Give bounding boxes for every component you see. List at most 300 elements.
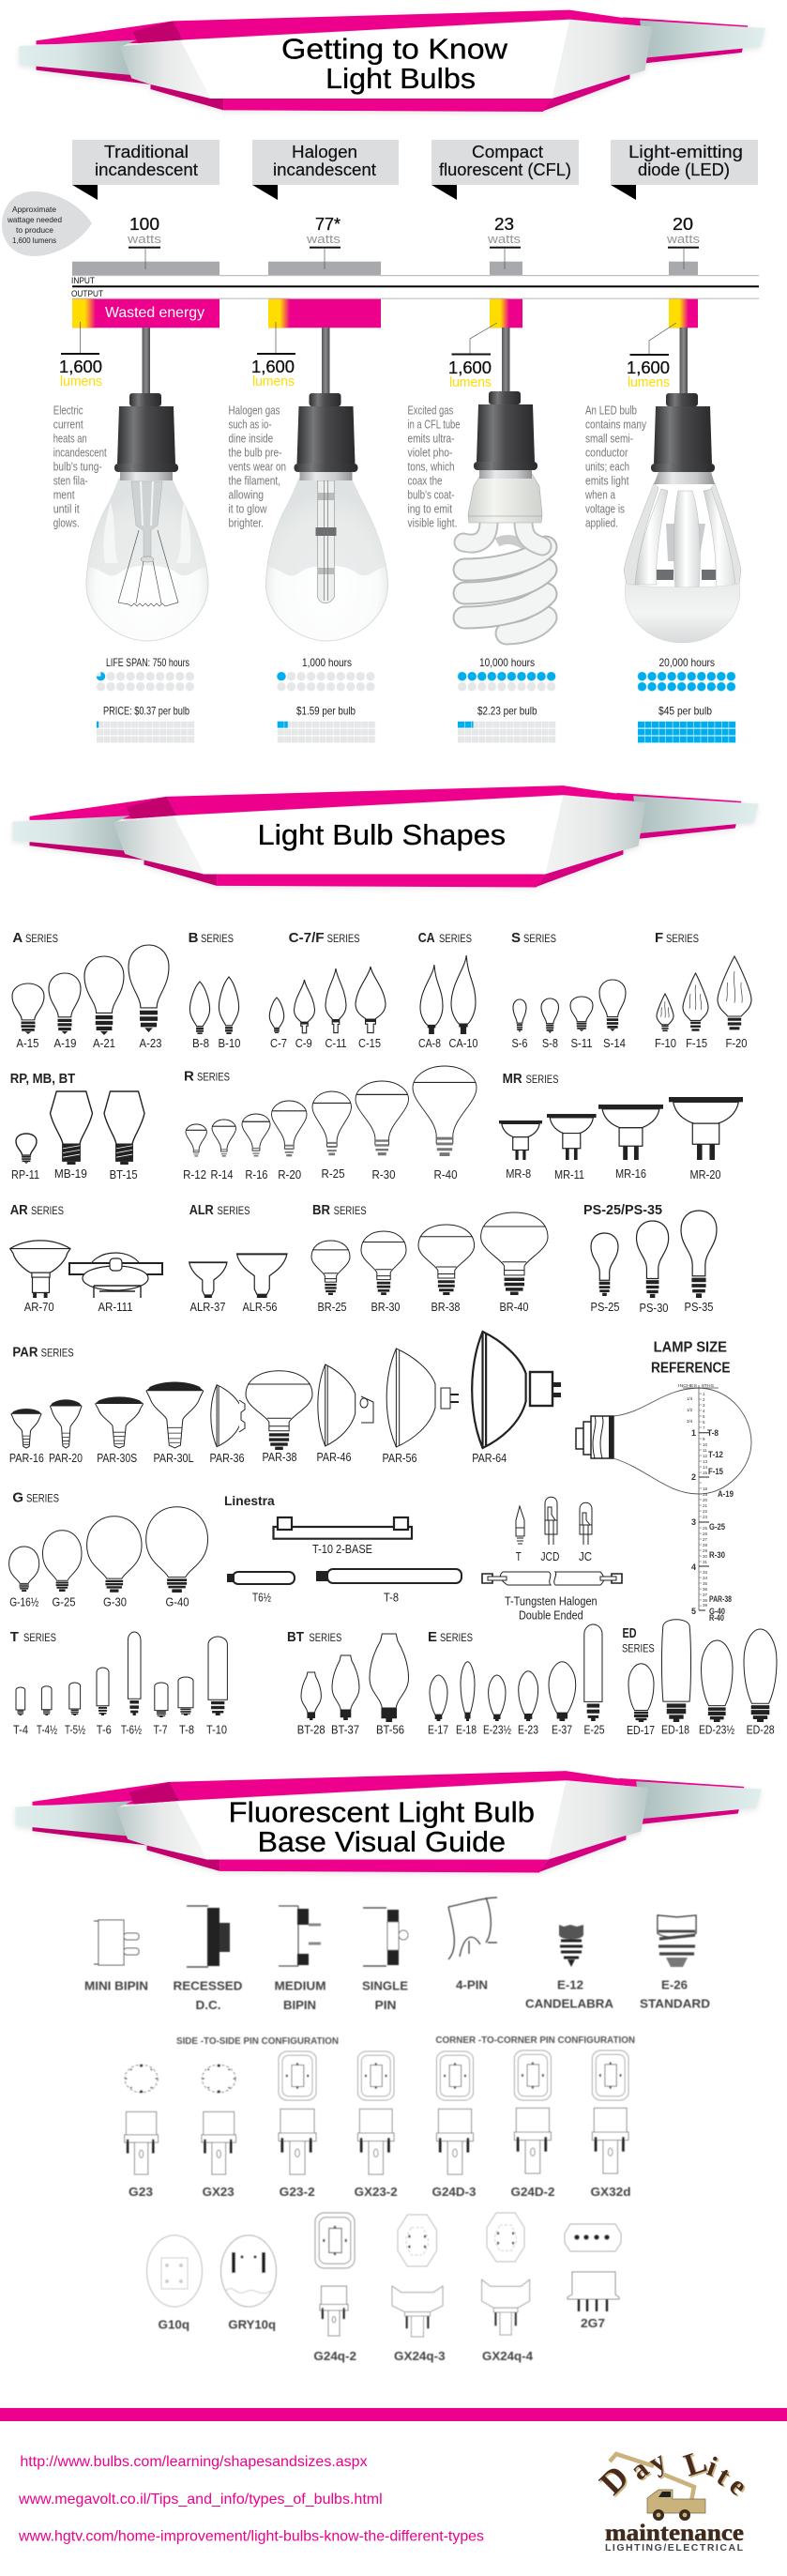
- series: B: B: [189, 930, 199, 946]
- icon: T6½ tube: [227, 1572, 295, 1584]
- group: T, JCD, JC halogen: JCD: [540, 1549, 559, 1563]
- series: G: [9, 1490, 207, 1609]
- series: ED: ED-28: [747, 1723, 775, 1737]
- panel: second base row: 2G7: [581, 2316, 605, 2330]
- diagram: inch ruler: 4: [703, 1409, 705, 1413]
- series: PAR: [9, 1332, 561, 1465]
- text: CFL description: [407, 404, 461, 530]
- icon: incandescent bulb: [86, 328, 208, 641]
- title: Fluorescent Light Bulb Base Visual Guide: Base Visual Guide: [257, 1825, 506, 1858]
- series: R: R-30: [371, 1167, 396, 1181]
- banner: Getting to Know Light Bulbs: [19, 10, 765, 112]
- chart: price grid: PRICE: $0.37 per bulb: [103, 705, 189, 718]
- labels: fluorescent base names: MEDIUM: [274, 1979, 326, 1993]
- chart: life span dots: [96, 656, 736, 692]
- series: AR: [10, 1202, 162, 1314]
- panel: pin configuration row: [125, 2050, 631, 2199]
- series: CA: CA: [418, 930, 435, 946]
- icon: G10q: [146, 2235, 203, 2307]
- series: B: B-10: [218, 1036, 240, 1050]
- series: AR: SERIES: [31, 1204, 64, 1217]
- logo wordmark: Day Lite: a: [625, 2453, 655, 2486]
- series: PAR: PAR-64: [472, 1451, 507, 1465]
- series: ED: ED-17: [627, 1723, 655, 1737]
- source links: http://www.bulbs.com/learning/shapesandsizes.aspx: [20, 2454, 368, 2470]
- series: BT: SERIES: [309, 1631, 341, 1644]
- icon: PAR-46 side lamp: [318, 1364, 373, 1446]
- diagram: inch ruler: 38: [703, 1598, 708, 1603]
- labels: fluorescent base names: E-26: [661, 1978, 688, 1991]
- chart: input wattage labels: watts: [666, 232, 701, 246]
- chart: lumens output labels: 1,600: [448, 358, 492, 377]
- diagram: inch ruler: 33: [703, 1570, 708, 1575]
- series: PAR: PAR-16: [9, 1451, 44, 1465]
- callout: approximate wattage: to produce: [16, 225, 53, 235]
- series: ED: [622, 1620, 777, 1737]
- series: MR: MR-16: [615, 1166, 646, 1181]
- text: LED description: An LED bulb: [585, 404, 637, 418]
- series: E: E-23½: [483, 1723, 511, 1737]
- series: RP, MB, BT: BT-15: [110, 1167, 138, 1181]
- header: traditional incandescent: incandescent: [95, 160, 198, 179]
- labels: fluorescent base names: SIDE -TO-SIDE PIN CONFIGURATION: [176, 2035, 339, 2047]
- series: Linestra: T6½: [252, 1591, 271, 1605]
- text: halogen description: dine inside: [229, 433, 273, 446]
- text: LED description: units; each: [585, 461, 629, 474]
- diagram: inch ruler: 34: [703, 1576, 708, 1580]
- icon: LED bulb: [624, 328, 741, 643]
- panel: lamp size reference: [576, 1340, 751, 1623]
- series: E: SERIES: [440, 1631, 473, 1644]
- icon: PAR-36 side lamp: [211, 1385, 245, 1447]
- series: RP, MB, BT: RP, MB, BT: [10, 1071, 75, 1087]
- series: PAR: PAR-46: [317, 1450, 351, 1464]
- icon: E-26 standard: [658, 1915, 696, 1967]
- labels: fluorescent base names: PIN: [375, 1998, 396, 2012]
- chart: lumens output labels: lumens: [449, 374, 492, 390]
- text: incandescent description: Electric: [53, 404, 83, 418]
- logo wordmark: Day Lite: D: [592, 2458, 636, 2502]
- series: Linestra: [224, 1493, 462, 1605]
- chart: input wattage labels: 20: [673, 215, 693, 234]
- diagram: inch ruler: [678, 1383, 734, 1623]
- diagram: inch ruler: 11: [703, 1448, 707, 1453]
- series: ED: ED-23½: [699, 1723, 734, 1737]
- series: ED: ED: [623, 1625, 637, 1641]
- icon: E-12 candelabra: [559, 1925, 583, 1967]
- series: A: A-19: [54, 1036, 77, 1050]
- title: Fluorescent Light Bulb Base Visual Guide: Fluorescent Light Bulb: [229, 1796, 535, 1829]
- panel: second base row: G24q-2: [313, 2349, 356, 2363]
- panel: fluorescent bases row: [94, 1898, 696, 1967]
- series: PAR: SERIES: [41, 1347, 74, 1360]
- series: BR: BR: [312, 1202, 330, 1218]
- diagram: inch ruler: 12: [703, 1454, 708, 1458]
- series: BR: BR-25: [317, 1300, 347, 1314]
- series: E: E-37: [552, 1723, 572, 1737]
- diagram: inch ruler: T-12: [708, 1450, 723, 1459]
- diagram: inch ruler: 5: [703, 1414, 705, 1419]
- labels: fluorescent base names: RECESSED: [173, 1979, 242, 1993]
- series: F: [655, 930, 751, 1050]
- header: halogen incandescent: Halogen: [292, 143, 357, 161]
- series: C-7/F: C-11: [325, 1036, 347, 1050]
- series: S: SERIES: [523, 932, 556, 945]
- text: CFL description: in a CFL tube: [407, 419, 461, 432]
- series: MR: MR-20: [690, 1167, 720, 1181]
- chart: output bars with wasted energy: [72, 299, 698, 328]
- group: T, JCD, JC halogen: Double Ended: [519, 1608, 583, 1623]
- diagram: inch ruler: 3/4: [687, 1419, 693, 1424]
- diagram: inch ruler: F-15: [708, 1467, 723, 1476]
- header: traditional incandescent: Traditional: [104, 143, 189, 161]
- series: A: A-21: [93, 1036, 115, 1050]
- diagram: inch ruler: 3: [691, 1517, 696, 1527]
- logo: Day Lite maintenance: [592, 2444, 753, 2553]
- series: ALR: ALR-37: [189, 1300, 225, 1314]
- series: CA: [418, 930, 478, 1050]
- logo wordmark: Day Lite: [592, 2444, 753, 2502]
- icon: 4-pin: [448, 1898, 497, 1959]
- diagram: inch ruler: A-19: [718, 1489, 734, 1499]
- series: PS-25/PS-35: PS-25/PS-35: [583, 1202, 662, 1218]
- series: S: S-11: [570, 1036, 593, 1050]
- diagram: bulb outline with base: [576, 1388, 751, 1494]
- series: PS-25/PS-35: PS-25: [591, 1300, 619, 1314]
- text: halogen description: vents wear on: [229, 461, 286, 474]
- diagram: inch ruler: 20: [703, 1498, 708, 1502]
- header: LED: diode (LED): [638, 160, 730, 179]
- text: LED description: emits light: [585, 475, 629, 488]
- chart axis: input and output: OUTPUT: [71, 289, 103, 299]
- series: PAR: PAR-20: [49, 1451, 83, 1465]
- labels: fluorescent base names: [84, 1978, 710, 2047]
- series: PAR: PAR-38: [263, 1450, 296, 1464]
- diagram: inch ruler: T-8: [707, 1428, 719, 1438]
- series: C-7/F: C-15: [358, 1036, 381, 1050]
- chart axis: input and output: [71, 275, 759, 299]
- title: Getting to Know Light Bulbs: [281, 32, 508, 95]
- series: C-7/F: C-7: [270, 1036, 287, 1050]
- chart: input wattage labels: 77*: [315, 215, 341, 234]
- series: G: G: [12, 1490, 23, 1506]
- series: T: [10, 1629, 227, 1737]
- chart: price grid: $45 per bulb: [658, 705, 712, 718]
- chart: life span dots: 10,000 hours: [479, 656, 535, 669]
- diagram: inch ruler: 10: [703, 1442, 708, 1447]
- icon: GX24q-4: [482, 2213, 530, 2335]
- series: R: R-25: [321, 1166, 345, 1181]
- chart: price grid: $1.59 per bulb: [296, 705, 356, 718]
- chart: input wattage labels: 23: [494, 215, 514, 234]
- panel: pin configuration row: G24D-2: [510, 2185, 555, 2199]
- icon: G24q-2: [315, 2213, 355, 2336]
- diagram: inch ruler: 25: [703, 1526, 708, 1531]
- diagram: inch ruler: G-40: [709, 1607, 725, 1616]
- series: A: A-15: [16, 1036, 38, 1050]
- series: T: T-6: [97, 1723, 112, 1737]
- series: T: T-4½: [37, 1723, 57, 1737]
- icon: single pin: [363, 1908, 408, 1966]
- series: T: T: [10, 1629, 19, 1645]
- icon: T-8 tube: [316, 1569, 462, 1583]
- series: A: [12, 930, 169, 1050]
- series: BR: BR-40: [499, 1300, 529, 1314]
- series: E: E-23: [518, 1723, 538, 1737]
- chart: lumens output labels: 1,600: [627, 358, 670, 377]
- text: incandescent description: until it: [53, 503, 80, 516]
- diagram: inch ruler: 1: [703, 1392, 705, 1396]
- series: G: G-16½: [9, 1595, 38, 1609]
- group: T, JCD, JC halogen: T-Tungsten Halogen: [505, 1594, 598, 1608]
- text: incandescent description: bulb's tung-: [53, 461, 102, 474]
- banner: Light Bulb Shapes: [12, 785, 759, 887]
- text: LED description: applied.: [585, 517, 618, 530]
- series: E: [428, 1624, 604, 1737]
- labels: fluorescent base names: SINGLE: [362, 1979, 408, 1993]
- series: A: SERIES: [25, 932, 58, 945]
- text: incandescent description: heats an: [53, 433, 87, 446]
- series: E: E-17: [428, 1723, 448, 1737]
- labels: fluorescent base names: STANDARD: [640, 1997, 710, 2010]
- callout: approximate wattage: wattage needed: [7, 215, 62, 224]
- group: T, JCD, JC halogen: T: [516, 1549, 522, 1563]
- chart: lumens output labels: lumens: [628, 374, 670, 390]
- text: CFL description: coax the: [407, 475, 443, 488]
- series: A: A: [12, 930, 23, 946]
- icon: PAR-56 side lamp: [386, 1349, 459, 1447]
- logo wordmark: Day Lite: y: [643, 2446, 671, 2479]
- series: S: S-8: [542, 1036, 558, 1050]
- series: R: R-12: [183, 1167, 206, 1181]
- diagram: inch ruler: R-40: [709, 1613, 724, 1623]
- text: halogen description: [229, 404, 286, 530]
- series: A: A-23: [139, 1036, 161, 1050]
- panel: second base row: [146, 2213, 621, 2363]
- diagram: inch ruler: G-25: [709, 1522, 725, 1532]
- diagram: inch ruler: 5: [691, 1607, 696, 1616]
- text: incandescent description: ment: [53, 489, 75, 502]
- series: R: R: [184, 1069, 194, 1085]
- chart: lumens output labels: [59, 322, 676, 390]
- chart: life span dots: 20,000 hours: [658, 656, 715, 669]
- chart: price grid: [97, 705, 736, 743]
- series: B: SERIES: [201, 932, 234, 945]
- labels: fluorescent base names: CORNER -TO-CORNER PIN CONFIGURATION: [435, 2035, 635, 2046]
- diagram: inch ruler: R-30: [709, 1550, 725, 1560]
- series: S: S-14: [603, 1036, 626, 1050]
- series: ALR: [189, 1202, 287, 1314]
- series: MR: MR-8: [506, 1166, 531, 1181]
- text: incandescent description: sten fila-: [53, 475, 88, 488]
- text: incandescent description: incandescent: [53, 447, 107, 460]
- diagram: inch ruler: 36: [703, 1587, 708, 1592]
- series: T: T-7: [154, 1723, 167, 1737]
- header: traditional incandescent: [72, 140, 219, 200]
- logo text: maintenance: maintenance: [605, 2521, 744, 2546]
- series: RP, MB, BT: RP-11: [11, 1167, 39, 1181]
- series: R: [183, 1066, 477, 1181]
- series: T: T-8: [179, 1723, 194, 1737]
- diagram: inch ruler: 27: [703, 1537, 708, 1542]
- labels: fluorescent base names: BIPIN: [283, 1998, 316, 2012]
- series: BT: [287, 1629, 409, 1737]
- series: F: SERIES: [666, 932, 699, 945]
- chart: lumens output labels: lumens: [60, 373, 102, 389]
- diagram: inch ruler: 1/4: [687, 1396, 693, 1401]
- icon: PAR-64 side lamp: [472, 1332, 561, 1448]
- series: T: SERIES: [23, 1631, 56, 1644]
- series: BT: BT-56: [376, 1723, 404, 1737]
- icon: T capsule: [516, 1506, 524, 1544]
- header: compact fluorescent: fluorescent (CFL): [439, 160, 571, 179]
- series: Linestra: Linestra: [224, 1493, 275, 1508]
- series: MR: MR: [503, 1071, 522, 1087]
- icon: boom truck: [610, 2454, 705, 2521]
- panel: second base row: GRY10q: [228, 2318, 276, 2332]
- text: LED description: conductor: [585, 447, 628, 460]
- text: LED description: voltage is: [585, 503, 625, 516]
- diagram: inch ruler: 19: [703, 1492, 708, 1497]
- chart: price grid: $2.23 per bulb: [477, 705, 537, 718]
- logo wordmark: Day Lite: L: [680, 2444, 711, 2484]
- icon: recessed D.C.: [187, 1906, 230, 1967]
- series: R: R-14: [210, 1167, 233, 1181]
- panel: pin configuration row: GX23: [203, 2185, 235, 2199]
- title: Getting to Know Light Bulbs: Getting to Know: [281, 32, 508, 66]
- series: E: E: [428, 1629, 437, 1645]
- group: T, JCD, JC halogen: [482, 1497, 622, 1623]
- chart: input wattage labels: watts: [127, 232, 162, 246]
- series: CA: SERIES: [439, 932, 472, 945]
- series: PS-25/PS-35: PS-35: [685, 1300, 713, 1314]
- chart: input bars: [72, 248, 698, 275]
- diagram: inch ruler: 7: [703, 1425, 705, 1430]
- diagram: inch ruler: 1/2: [687, 1408, 693, 1412]
- icon: mini bipin: [94, 1920, 139, 1965]
- header: compact fluorescent: [431, 140, 579, 200]
- text: LED description: [584, 404, 647, 530]
- diagram: inch ruler: 4: [691, 1562, 696, 1572]
- text: CFL description: violet pho-: [407, 447, 452, 460]
- series: MR: MR-11: [554, 1167, 584, 1181]
- series: S: [511, 930, 626, 1050]
- labels: fluorescent base names: D.C.: [195, 1998, 221, 2012]
- text: halogen description: the bulb pre-: [229, 447, 281, 460]
- text: LED description: small semi-: [585, 433, 633, 446]
- chart: life span dots: LIFE SPAN: 750 hours: [106, 656, 189, 669]
- series: G: SERIES: [26, 1492, 59, 1505]
- diagram: inch ruler: 30: [703, 1554, 708, 1559]
- diagram: inch ruler: 21: [703, 1503, 708, 1508]
- series: C-7/F: C-9: [295, 1036, 312, 1050]
- series: MR: [499, 1071, 743, 1181]
- chart axis: input and output: INPUT: [71, 276, 95, 286]
- logo wordmark: Day Lite: t: [712, 2461, 735, 2492]
- series: R: R-20: [278, 1167, 301, 1181]
- chart: input wattage labels: 100: [129, 215, 159, 234]
- icon: T-10 2-base tube: [274, 1517, 412, 1539]
- series: G: G-30: [103, 1595, 127, 1609]
- text: halogen description: the filament,: [229, 475, 280, 488]
- diagram: inch ruler: PAR-38: [709, 1594, 732, 1604]
- diagram: inch ruler: 22: [703, 1509, 708, 1514]
- title: Light Bulb Shapes: Light Bulb Shapes: [257, 818, 506, 851]
- diagram: inch ruler: 23: [703, 1515, 708, 1519]
- header: compact fluorescent: Compact: [472, 143, 543, 161]
- diagram: inch ruler: 31: [703, 1560, 708, 1564]
- series: ED: ED-18: [661, 1723, 689, 1737]
- chart: input wattage labels: watts: [487, 232, 522, 246]
- series: PAR: PAR-56: [383, 1451, 416, 1465]
- source links: [18, 2454, 484, 2545]
- diagram: inch ruler: 1: [691, 1428, 696, 1438]
- text: halogen description: it to glow: [229, 503, 267, 516]
- panel: lamp size reference: REFERENCE: [651, 1361, 731, 1377]
- icon: medium bipin: [279, 1906, 321, 1966]
- label: wasted energy: Wasted energy: [105, 305, 204, 321]
- header: LED: Light-emitting: [628, 143, 743, 161]
- series: R: R-40: [433, 1167, 458, 1181]
- series: BR: SERIES: [334, 1204, 367, 1217]
- text: CFL description: ing to emit: [407, 503, 453, 516]
- text: halogen description: Halogen gas: [229, 404, 280, 418]
- series: S: S-6: [512, 1036, 527, 1050]
- icon: GX24q-3: [392, 2215, 443, 2337]
- text: halogen description: brighter.: [229, 517, 264, 530]
- source links: www.megavolt.co.il/Tips_and_info/types_of_bulbs.html: [18, 2492, 383, 2507]
- title: Fluorescent Light Bulb Base Visual Guide: [229, 1796, 535, 1858]
- text: CFL description: bulb's coat-: [407, 489, 454, 502]
- series: F: F-10: [655, 1036, 676, 1050]
- series: T: T-4: [13, 1723, 28, 1737]
- series: BT: BT: [287, 1629, 304, 1645]
- diagram: inch ruler: 13: [703, 1459, 708, 1464]
- series: PAR: PAR-30L: [154, 1451, 193, 1465]
- series: PS-25/PS-35: PS-30: [640, 1301, 668, 1315]
- diagram: inch ruler: 9: [703, 1437, 705, 1441]
- labels: fluorescent base names: MINI BIPIN: [84, 1979, 148, 1993]
- header: LED: [611, 140, 758, 200]
- group: T, JCD, JC halogen: JC: [579, 1549, 592, 1563]
- chart: lumens output labels: lumens: [252, 373, 295, 389]
- text: incandescent description: glows.: [53, 517, 80, 530]
- callout: approximate wattage: Approximate: [12, 205, 56, 214]
- text: incandescent description: current: [53, 419, 83, 432]
- diagram: inch ruler: 28: [703, 1543, 708, 1547]
- series: CA: CA-8: [418, 1036, 441, 1050]
- series: MR: SERIES: [525, 1073, 559, 1086]
- text: CFL description: emits ultra-: [407, 433, 454, 446]
- series: C-7/F: [269, 930, 386, 1050]
- series: F: F-15: [686, 1036, 707, 1050]
- text: halogen description: allowing: [229, 489, 264, 502]
- series: E: E-25: [583, 1723, 604, 1737]
- diagram: inch ruler: INCHES: [678, 1383, 697, 1388]
- series: CA: CA-10: [448, 1036, 478, 1050]
- panel: second base row: G10q: [159, 2318, 189, 2332]
- series: G: G-40: [165, 1595, 189, 1609]
- logo wordmark: Day Lite: i: [704, 2451, 721, 2482]
- panel: pin configuration row: GX32d: [591, 2185, 631, 2199]
- series: T: T-10: [206, 1723, 227, 1737]
- text: LED description: when a: [584, 489, 615, 502]
- series: PAR: PAR-30S: [97, 1451, 137, 1465]
- series: S: S: [511, 930, 521, 946]
- series: C-7/F: SERIES: [327, 932, 360, 945]
- series: R: SERIES: [197, 1071, 230, 1084]
- panel: lamp size reference: LAMP SIZE: [654, 1340, 727, 1356]
